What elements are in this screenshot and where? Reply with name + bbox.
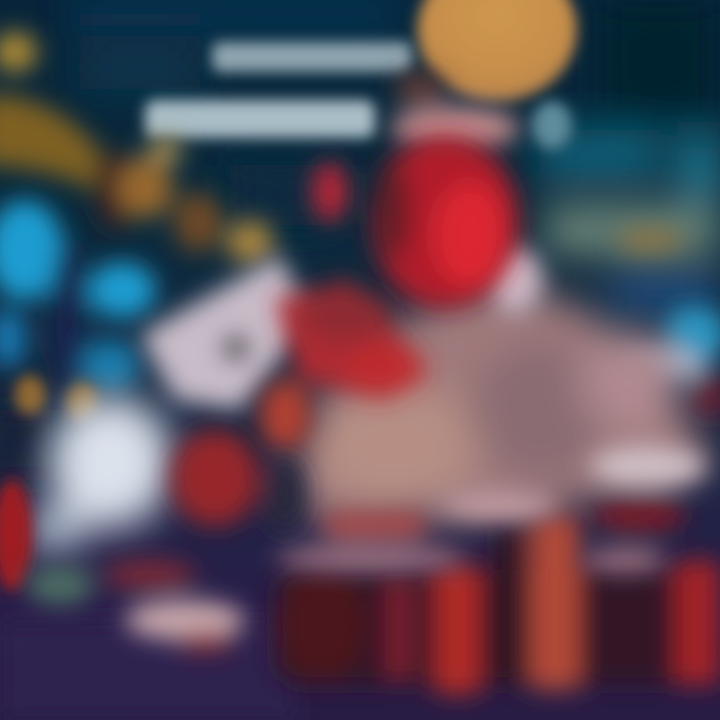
headline line one — [212, 42, 412, 72]
white playing card — [140, 255, 310, 410]
headline line two — [145, 100, 375, 138]
chip stacks — [275, 515, 720, 695]
red forearm — [171, 430, 305, 533]
blue neon lights on left — [0, 200, 156, 400]
chip stack three — [530, 515, 580, 690]
gold lights on left — [0, 32, 274, 264]
red hand holding card — [259, 280, 430, 451]
headline accent — [532, 101, 572, 149]
player hair and forehead highlight — [390, 72, 520, 150]
blurred headline text — [145, 42, 572, 149]
chip stack two — [435, 565, 480, 695]
white sleeve on left — [25, 396, 172, 552]
small chips at left — [26, 560, 245, 652]
chip stack one — [278, 570, 366, 680]
white shoulder — [487, 246, 543, 314]
chip tops and cuffs — [275, 446, 706, 571]
table surface — [0, 615, 300, 720]
chip stack base — [275, 570, 720, 685]
chip stack four — [675, 560, 720, 685]
sun-like orange orb — [417, 0, 577, 102]
small orange lights — [14, 375, 98, 422]
left red object — [0, 479, 32, 591]
player red face — [312, 136, 519, 308]
player torso — [290, 289, 710, 530]
background glow panels — [0, 0, 720, 480]
right side pale blue glow — [616, 228, 720, 419]
